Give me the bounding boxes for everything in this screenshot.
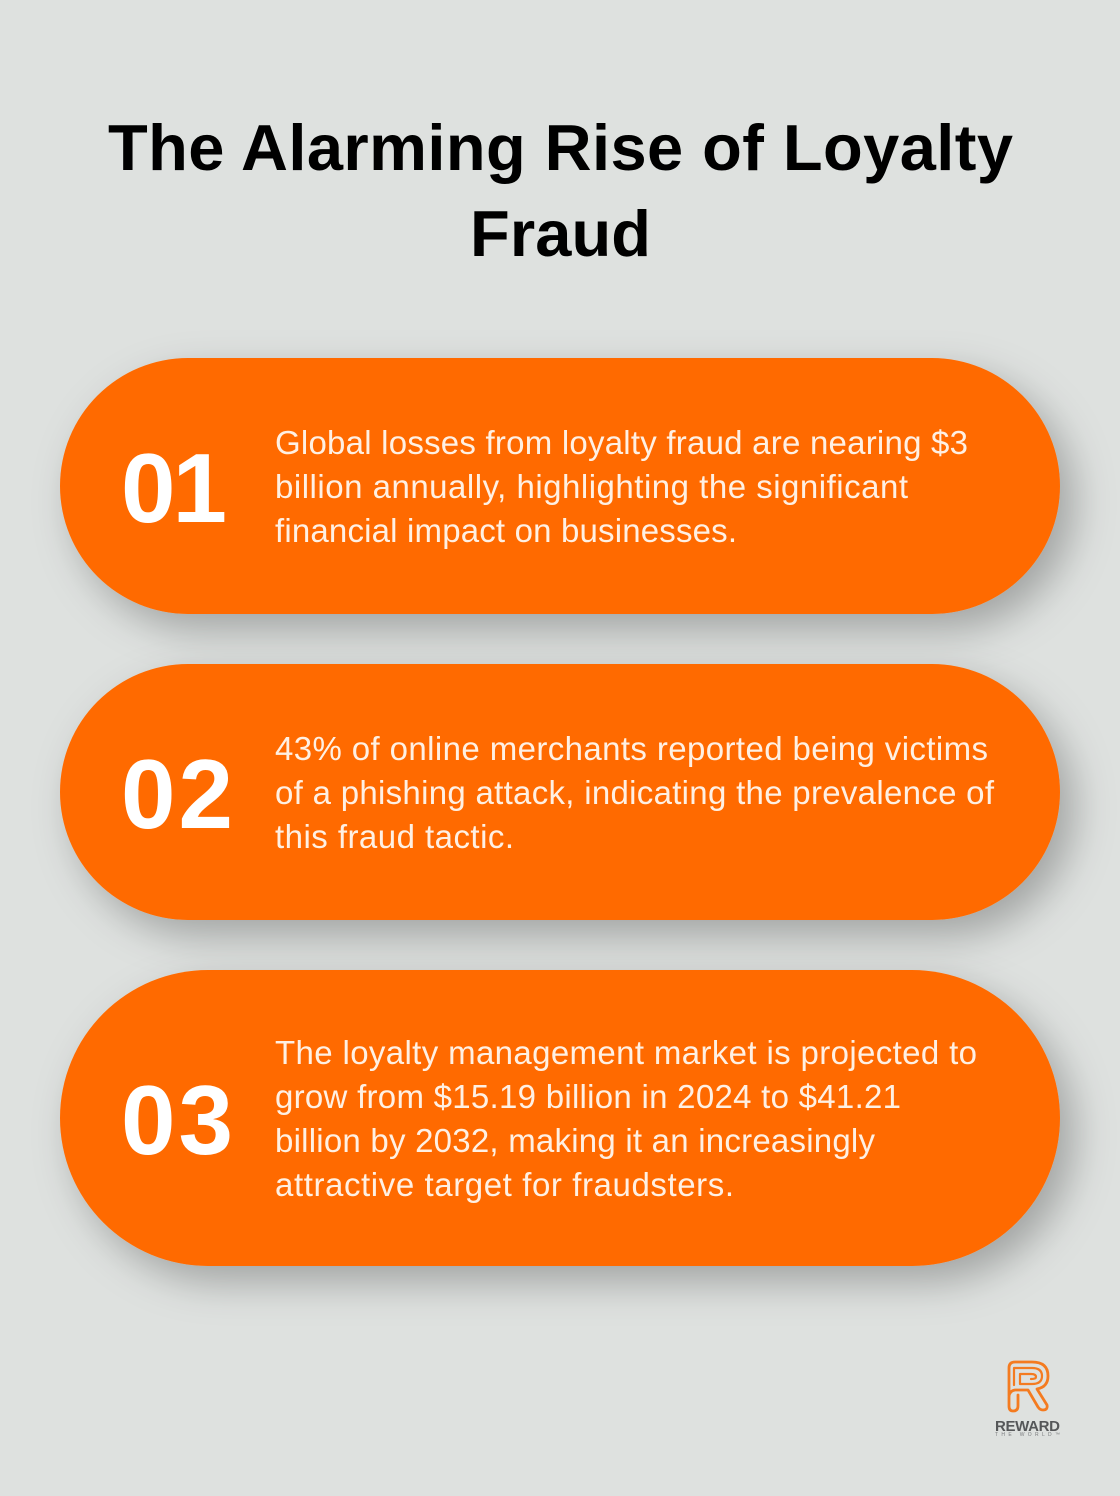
text: fact 03: attractive target for fraudsters.: [275, 1166, 734, 1203]
tagline: THE WORLD™: [995, 1432, 1060, 1438]
text: fact 02: 43% of online merchants reported being victims: [275, 730, 988, 767]
text: fact 01: Global losses from loyalty fraud are nearing $3: [275, 424, 968, 461]
logo: Reward the World: [995, 1362, 1060, 1438]
wordmark: REWARD: [995, 1418, 1060, 1435]
panel: fact 03: [60, 970, 1060, 1266]
text: fact 01: financial impact on businesses.: [275, 512, 737, 549]
text: fact 02: of a phishing attack, indicating the prevalence of: [275, 774, 995, 811]
number 03: 03: [121, 1065, 233, 1175]
text: fact 03: The loyalty management market is projected to: [275, 1034, 977, 1071]
icon: stylised R: [1009, 1362, 1048, 1411]
number 02: 02: [121, 739, 233, 849]
text: fact 01: [275, 424, 968, 549]
title: The Alarming Rise of Loyalty: [108, 111, 1013, 184]
text: fact 03: [275, 1034, 977, 1203]
panel: fact 02: [60, 664, 1060, 920]
text: fact 03: grow from $15.19 billion in 2024 to $41.21: [275, 1078, 901, 1115]
number 01: 01: [121, 433, 227, 543]
panel: fact 01: [60, 358, 1060, 614]
text: fact 02: this fraud tactic.: [275, 818, 514, 855]
text: fact 01: billion annually, highlighting the significant: [275, 468, 908, 505]
title: Fraud: [470, 197, 651, 270]
text: fact 03: billion by 2032, making it an increasingly: [275, 1122, 876, 1159]
text: fact 02: [275, 730, 995, 855]
title: [108, 111, 1013, 270]
